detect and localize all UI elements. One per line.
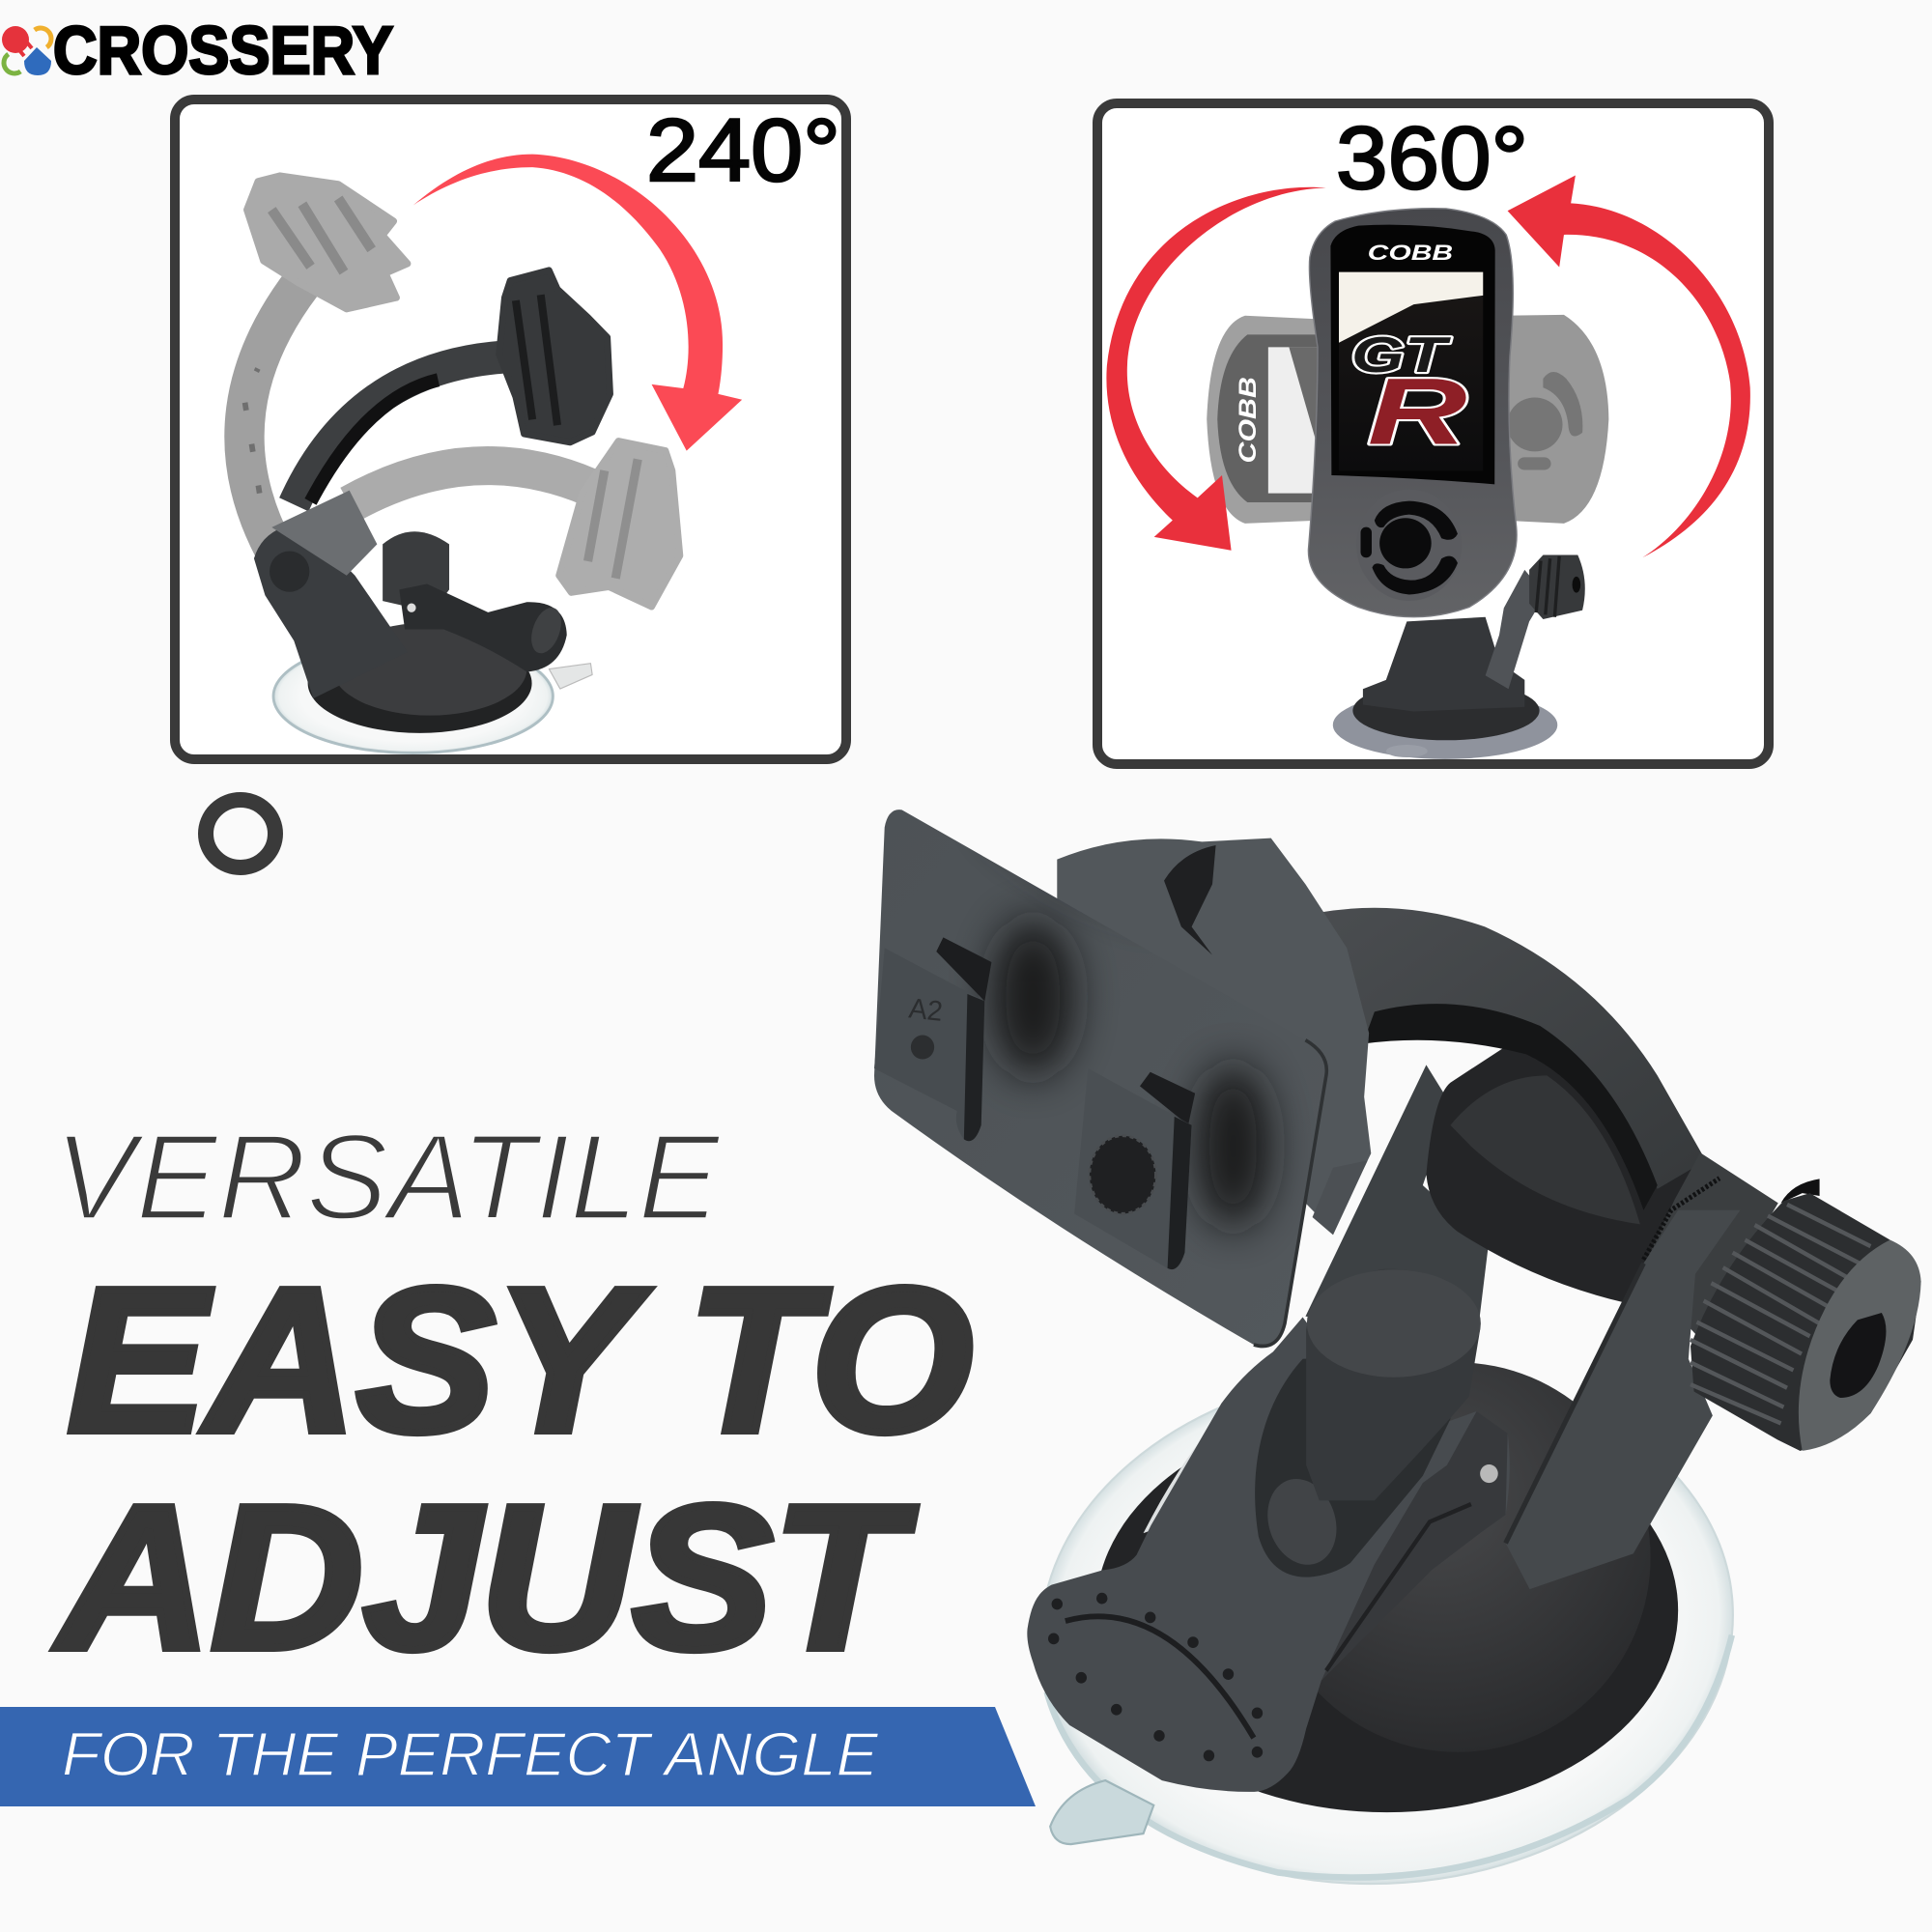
sleeve floor	[1257, 1469, 1348, 1575]
pivot bolt	[270, 551, 309, 592]
knob face	[1799, 1240, 1921, 1451]
rubber base	[308, 634, 532, 733]
post	[383, 531, 449, 612]
pad dots	[1048, 1593, 1263, 1761]
disc tab	[1050, 1780, 1153, 1844]
lever pin	[1480, 1464, 1498, 1483]
lever arm	[1321, 1411, 1508, 1681]
ghost overlay above bracket	[271, 491, 377, 576]
clip B	[1074, 1068, 1192, 1269]
ghost right buttons	[1507, 372, 1582, 469]
ghost arm upper	[244, 272, 310, 550]
device body	[1308, 209, 1517, 617]
plate dark shadows	[968, 798, 1271, 1228]
black crescent behind knob	[1781, 1179, 1820, 1203]
post	[1306, 1269, 1480, 1500]
stamp	[1090, 1136, 1155, 1213]
suction disc	[273, 639, 553, 753]
knob ribs	[1536, 556, 1559, 617]
banner shape	[0, 1707, 1036, 1806]
ghost knob upper ribs	[271, 198, 372, 272]
ghost knob lower ribs	[588, 459, 638, 579]
red arrow right	[1508, 176, 1750, 557]
panel background	[175, 99, 846, 759]
ghost arm lower	[350, 466, 590, 504]
knob dark grip	[1164, 845, 1216, 955]
ghost arm holes	[244, 368, 260, 494]
disc lower rim	[1047, 1635, 1732, 1878]
knob hole	[1573, 577, 1580, 593]
ring marker	[206, 800, 275, 867]
GT badge: GT	[1351, 327, 1451, 384]
knob	[1529, 554, 1585, 619]
rubber base	[1352, 681, 1540, 740]
dome	[332, 622, 526, 716]
suction disc	[1024, 1346, 1749, 1907]
lever groove	[1326, 1504, 1471, 1670]
arm top	[1320, 908, 1706, 1189]
front strap	[1506, 1210, 1740, 1589]
red arrow left	[1106, 187, 1326, 551]
hex hole	[1830, 1313, 1886, 1398]
logo wordmark: CROSSERY	[53, 13, 393, 88]
device face black	[1330, 225, 1495, 484]
clip B top	[1140, 1072, 1195, 1125]
bracket	[254, 527, 408, 698]
collar	[1640, 1152, 1778, 1338]
product: COBB device on mount	[1207, 209, 1608, 759]
dark knob ribs	[516, 295, 557, 425]
panel background	[1097, 103, 1769, 764]
ghost lcd	[1268, 347, 1321, 494]
lever	[399, 584, 567, 671]
heading: VERSATILE: VERSATILE	[54, 1109, 722, 1245]
button cluster	[1356, 489, 1462, 601]
knob knurling	[1690, 1205, 1870, 1423]
collar bead line	[1643, 1179, 1719, 1260]
disc sliver beside lever	[1144, 1434, 1207, 1533]
plate edge	[1254, 1040, 1326, 1347]
clip A2 label: A2	[907, 993, 944, 1028]
dome	[1264, 1362, 1651, 1752]
disc tab	[1386, 745, 1428, 757]
knob body	[1690, 1193, 1921, 1451]
red arrow 240	[413, 155, 742, 451]
ghost COBB text: COBB	[1236, 377, 1262, 463]
lcd white area	[1339, 272, 1483, 343]
clip B side	[1168, 1117, 1192, 1269]
lever pad recess	[526, 604, 567, 658]
rubber base	[1095, 1408, 1678, 1812]
heading: ADJUST: ADJUST	[54, 1463, 917, 1691]
ghost device left	[1207, 316, 1321, 524]
lever sleeve shadow	[1255, 1351, 1450, 1577]
knob behind plate	[1057, 838, 1371, 1232]
ghost knob upper	[246, 176, 408, 309]
R badge: R	[1368, 359, 1467, 465]
clip A2 side	[964, 994, 984, 1141]
lever body	[1027, 1317, 1510, 1792]
lcd	[1339, 272, 1483, 470]
ghost knob lower	[559, 441, 680, 607]
panel: 240 degree rotation	[175, 99, 846, 759]
dark arm underside	[310, 380, 439, 501]
icon: crossery heart knot	[0, 24, 55, 77]
mount strap	[1486, 570, 1546, 689]
panel: 360 degree rotation	[1097, 103, 1769, 764]
arm underside	[1364, 1004, 1658, 1210]
clip A2 dimple	[911, 1036, 934, 1059]
clip A2	[874, 948, 984, 1141]
COBB wordmark: COBB	[1368, 240, 1453, 265]
plate	[874, 798, 1326, 1347]
post top	[1307, 1269, 1481, 1378]
banner text: FOR THE PERFECT ANGLE	[62, 1719, 879, 1789]
strap edge	[1506, 1264, 1643, 1543]
label 360 degrees: 360°	[1336, 109, 1528, 208]
ghost lcd dark	[1289, 347, 1321, 460]
clip A2 top	[936, 937, 991, 1001]
panel border	[1097, 103, 1769, 764]
mount body	[1363, 617, 1524, 711]
product: suction mount hero	[874, 798, 1921, 1907]
ghost device right	[1501, 315, 1608, 524]
lever pin	[407, 603, 416, 612]
panel border	[175, 99, 846, 759]
arm bulb dark	[1426, 1033, 1719, 1302]
dark knob	[499, 270, 611, 442]
heading: EASY TO: EASY TO	[68, 1245, 973, 1474]
banner	[0, 1707, 1036, 1806]
disc tab	[549, 664, 592, 689]
logo: CROSSERY	[0, 13, 393, 88]
back strap	[1305, 1065, 1489, 1330]
arm bulb highlight	[1450, 1075, 1640, 1224]
ghost screen left	[1217, 334, 1321, 502]
lower knob sliver	[1313, 1160, 1368, 1235]
pad recess line	[1065, 1616, 1254, 1738]
dark arm	[294, 357, 502, 504]
product: mount at three arm positions	[244, 176, 680, 753]
label 240 degrees: 240°	[646, 101, 840, 200]
suction disc	[1333, 691, 1557, 759]
